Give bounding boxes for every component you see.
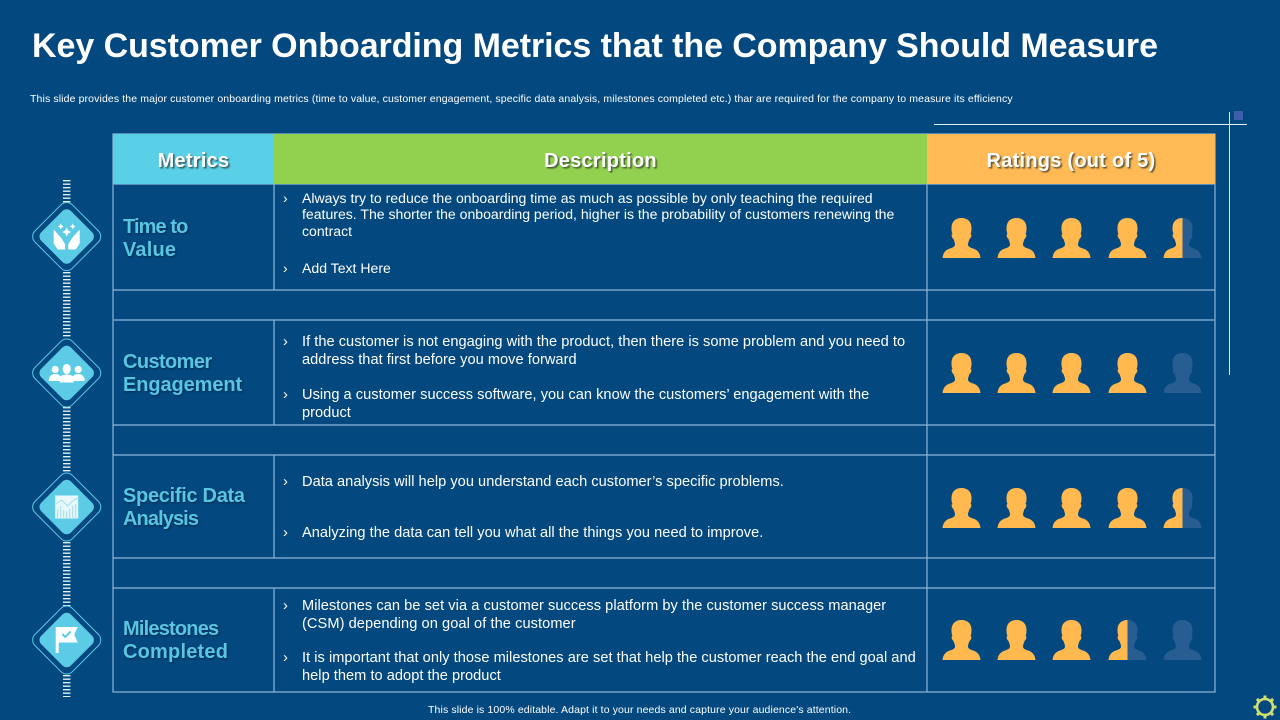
description: time to value [283,190,894,276]
description: milestones completed: Milestones can be set via a customer success platform by the customer success manager [302,598,886,614]
description: time to value: › [283,260,288,276]
description: time to value: features. The shorter the onboarding period, higher is the probability of customers renewing the [302,206,894,222]
description: customer engagement: product [302,405,351,421]
description: time to value: Always try to reduce the onboarding time as much as possible by only teaching the required [302,190,873,206]
description: specific data analysis: Analyzing the data can tell you what all the things you need to improve. [302,525,763,541]
description: customer engagement: › [283,334,288,350]
icon: caring hands [29,199,104,274]
description: specific data analysis [283,474,784,541]
header: ratings [927,134,1215,184]
description: customer engagement [283,334,905,421]
icon: milestone flag [29,603,104,677]
icon: customer group [29,336,104,410]
metric: time to value: Value [123,239,176,261]
metric: customer engagement: Engagement [123,374,242,396]
description: customer engagement: Using a customer success software, you can know the customers’ engagement with the [302,387,869,403]
description: milestones completed: › [283,650,288,666]
description: specific data analysis: › [283,525,288,541]
description: customer engagement: If the customer is not engaging with the product, then there is some problem and you need to [302,334,905,350]
ratings: milestones completed 3.5 [942,620,1202,660]
description: milestones completed: It is important that only those milestones are set that help the customer reach the end goal and [302,650,916,666]
footer note: This slide is 100% editable. Adapt it to your needs and capture your audience's attention. [428,704,851,716]
ratings: specific data analysis 4.5 [942,488,1202,528]
metric: milestones completed: Completed [123,641,228,663]
metric: specific data analysis [123,485,247,531]
description: specific data analysis: Data analysis will help you understand each customer’s specific problems. [302,474,784,490]
icon: data chart [29,470,104,544]
header: description: Description [544,150,657,172]
timeline ladders [63,180,70,697]
title: Key Customer Onboarding Metrics that the Company Should Measure [32,27,1158,65]
decorative corner square [1234,111,1243,120]
metric: milestones completed [123,618,228,664]
subtitle: This slide provides the major customer onboarding metrics (time to value, customer engagement, specific data analysis, milestones completed etc.) thar are required for the company to measure its efficiency [30,93,1013,105]
description: specific data analysis: › [283,474,288,490]
description: customer engagement: address that first before you move forward [302,352,577,368]
description: customer engagement: › [283,387,288,403]
description: milestones completed: (CSM) depending on goal of the customer [302,616,576,632]
metric: time to value: Time to [123,216,187,238]
description: milestones completed [283,598,916,684]
description: time to value: contract [302,223,352,239]
metric: customer engagement: Customer [123,351,212,373]
icon: settings gear [1254,696,1276,718]
metric: specific data analysis: Analysis [123,508,198,530]
ratings: time to value 4.5 [942,218,1202,258]
description: time to value: Add Text Here [302,260,391,276]
metric: customer engagement [123,351,244,397]
metric: milestones completed: Milestones [123,618,218,640]
description: milestones completed: help them to adopt the product [302,668,501,684]
metric: time to value [123,216,190,261]
table grid [113,134,1215,692]
metric: specific data analysis: Specific Data [123,485,245,507]
header: metrics [113,134,274,184]
description: time to value: › [283,190,288,206]
header: metrics: Metrics [158,150,229,172]
description: milestones completed: › [283,598,288,614]
header: ratings: Ratings (out of 5) [987,150,1155,172]
header: description [274,134,927,184]
ratings: customer engagement 4 [942,353,1202,393]
